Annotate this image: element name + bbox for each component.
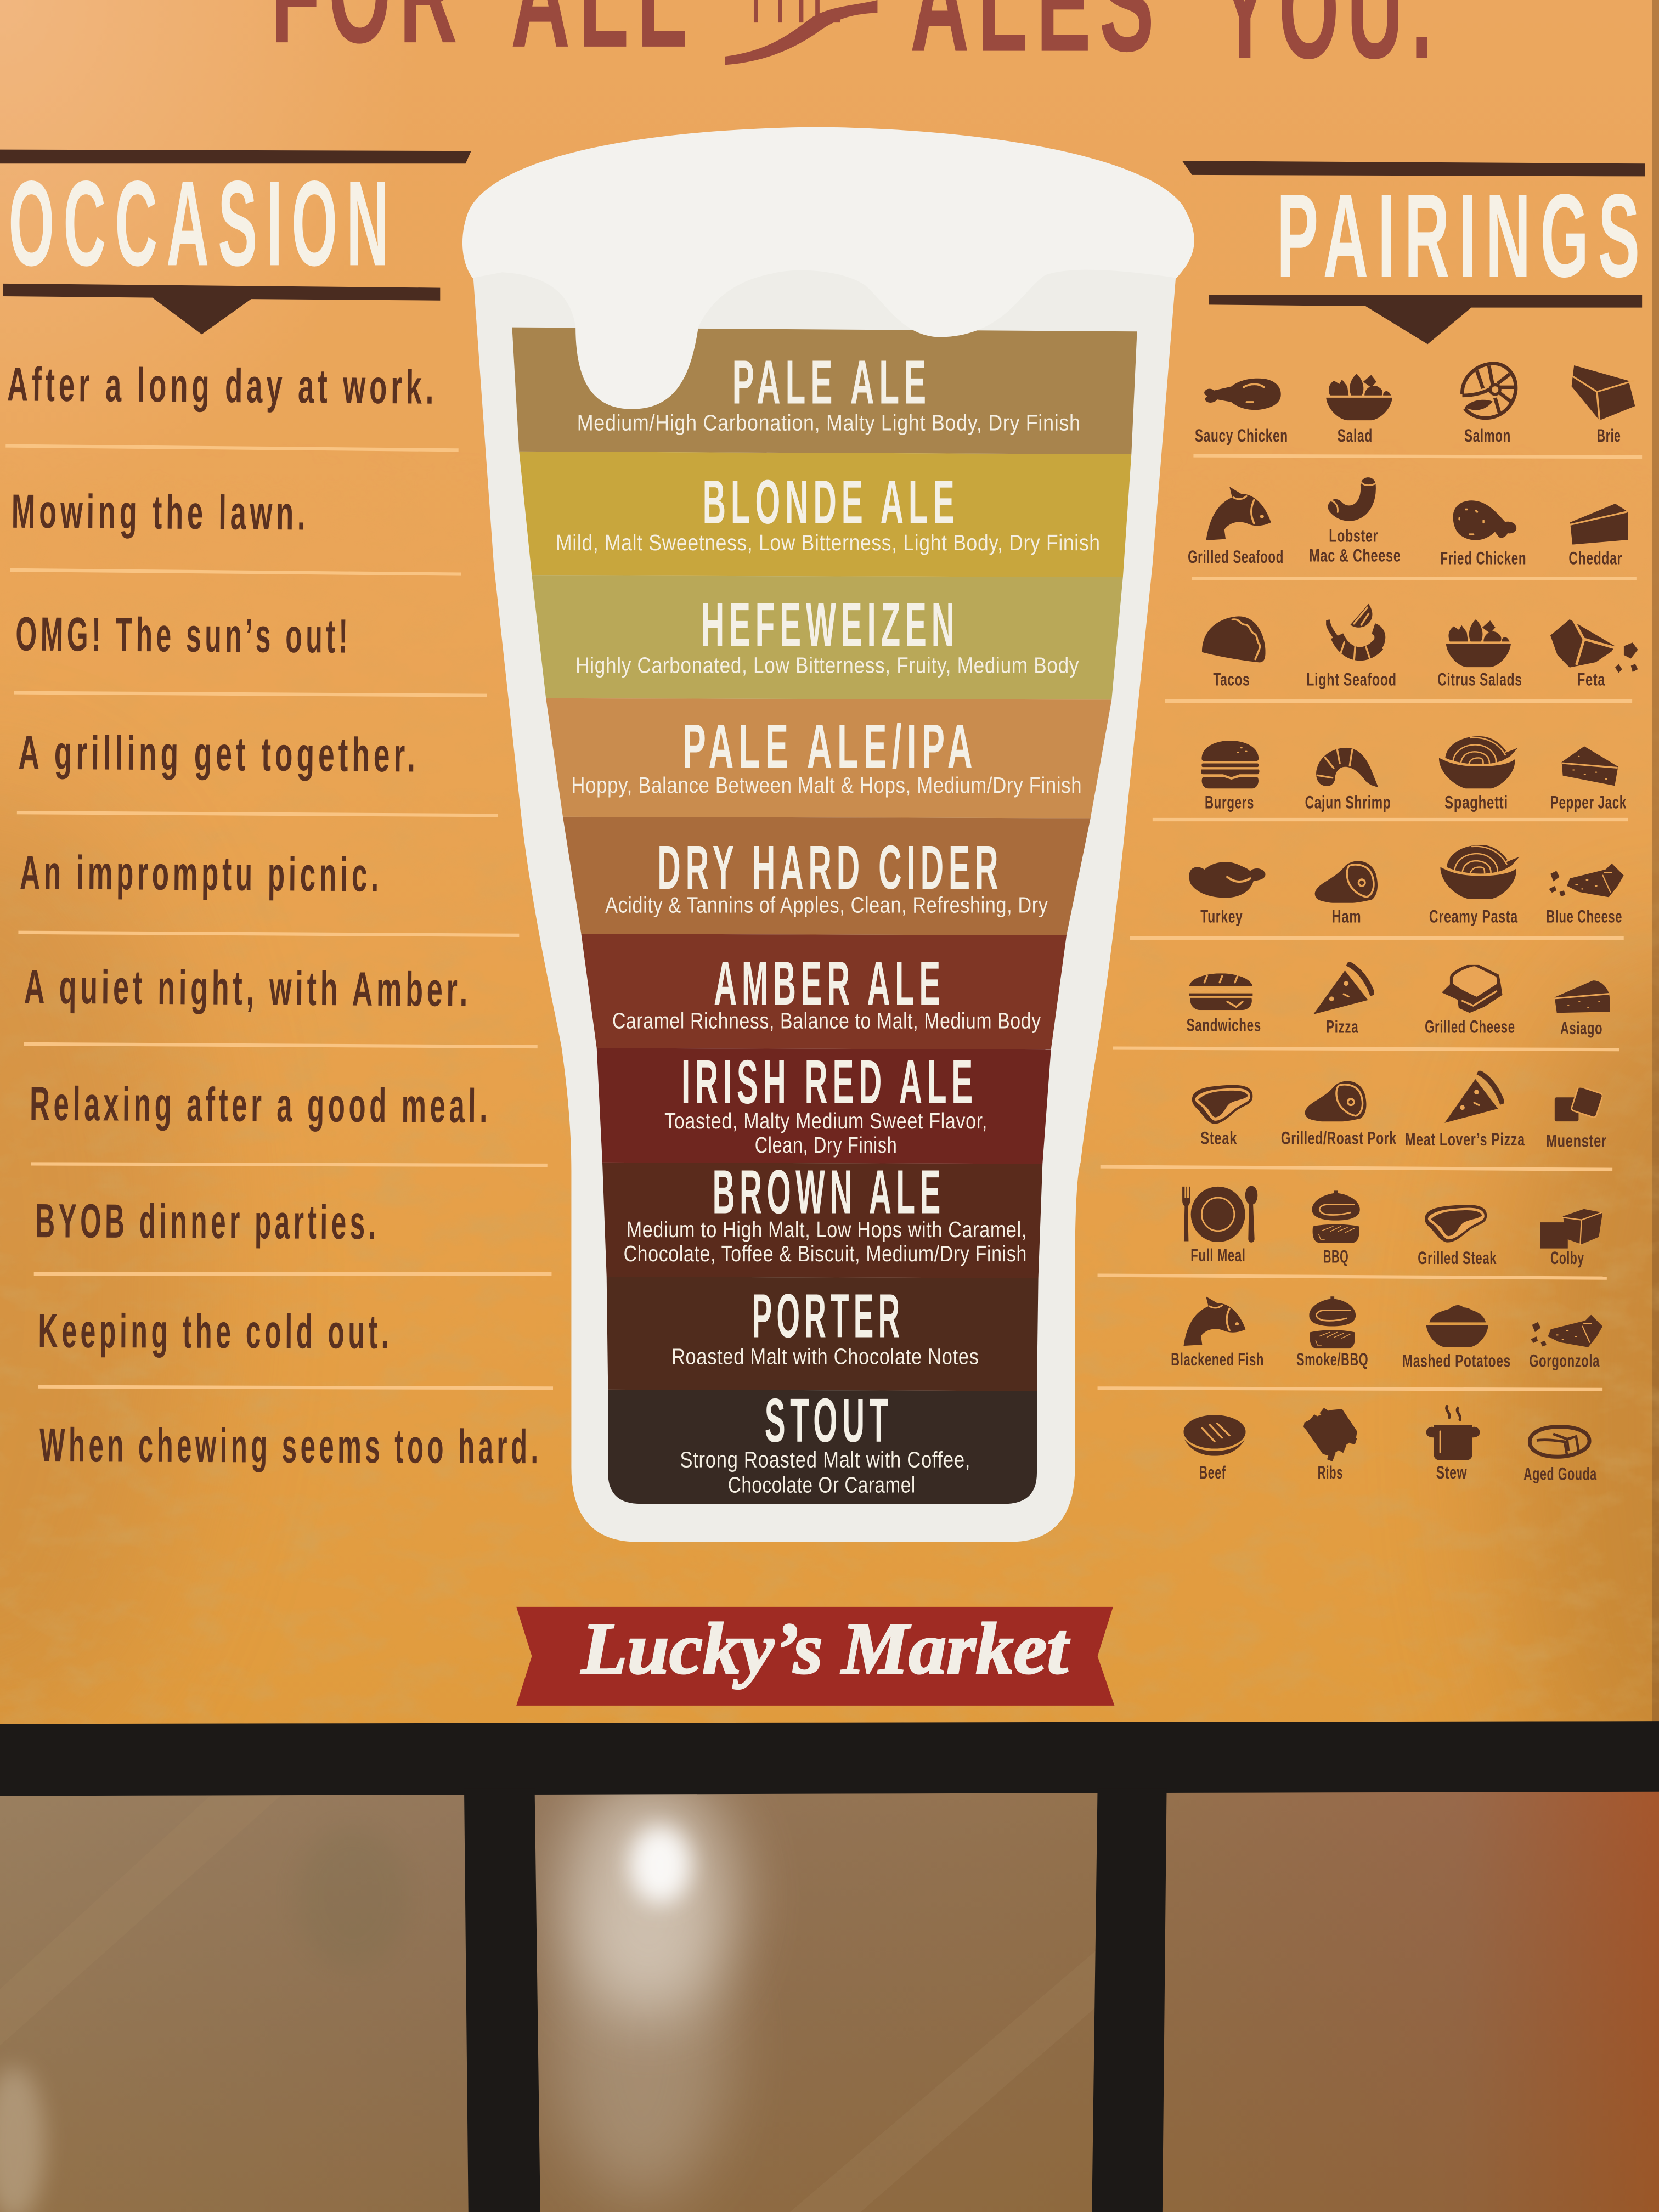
row 7: [1101, 1072, 1612, 1170]
row 6: Sandwiches: [1187, 1015, 1261, 1035]
foam: [462, 127, 1194, 409]
row 10: Stew: [1436, 1463, 1467, 1482]
row 7: Meat Lover’s Pizza: [1405, 1130, 1525, 1149]
band: Dry Hard Cider: [563, 817, 1091, 935]
row 5: [1130, 845, 1624, 938]
band: Pale Ale: Medium/High Carbonation, Malty Light Body, Dry Finish: [577, 410, 1081, 435]
row 1: Saucy Chicken: [1195, 426, 1288, 445]
band: Amber Ale: AMBER ALE: [714, 949, 945, 1018]
band: Amber Ale: Caramel Richness, Balance to Malt, Medium Body: [612, 1008, 1041, 1034]
band: Irish Red Ale: [597, 1047, 1051, 1164]
band: Hefeweizen: HEFEWEIZEN: [701, 590, 960, 659]
occasion item 4: A grilling get together.: [18, 725, 419, 782]
row 9: Gorgonzola: [1529, 1351, 1600, 1371]
row 2: Lobster: [1329, 526, 1378, 545]
occasion item 8: BYOB dinner parties.: [35, 1194, 380, 1249]
band: Dry Hard Cider: DRY HARD CIDER: [657, 833, 1003, 902]
row 1: Brie: [1597, 426, 1621, 445]
band: Pale Ale/IPA: Hoppy, Balance Between Malt & Hops, Medium/Dry Finish: [571, 772, 1082, 798]
row 6: Grilled Cheese: [1425, 1017, 1515, 1036]
band: Porter: PORTER: [752, 1282, 904, 1351]
row 7: Grilled/Roast Pork: [1281, 1128, 1397, 1148]
row 5: Ham: [1331, 907, 1361, 927]
row 3: Feta: [1577, 670, 1605, 690]
display frame: [0, 1721, 1659, 2212]
occasion item 5: An impromptu picnic.: [20, 845, 382, 902]
banner: Lucky's Market: Lucky’s Market: [580, 1608, 1070, 1689]
occasion item 9: Keeping the cold out.: [38, 1304, 392, 1359]
row 2: Cheddar: [1568, 549, 1622, 568]
band: Stout: STOUT: [765, 1386, 893, 1455]
row 2: Fried Chicken: [1440, 549, 1526, 568]
band: Stout: Chocolate Or Caramel: [728, 1472, 916, 1498]
band: Brown Ale: [602, 1157, 1042, 1278]
row 5: Creamy Pasta: [1429, 907, 1518, 927]
row 10: Beef: [1199, 1463, 1226, 1482]
band: Brown Ale: Chocolate, Toffee & Biscuit, Medium/Dry Finish: [624, 1241, 1027, 1266]
row 7: Muenster: [1546, 1131, 1607, 1151]
band: Irish Red Ale: Clean, Dry Finish: [755, 1132, 897, 1158]
row 10: Ribs: [1318, 1463, 1343, 1482]
row 3: [1165, 604, 1638, 701]
row 4: Spaghetti: [1444, 792, 1508, 812]
band: Pale Ale/IPA: PALE ALE/IPA: [683, 712, 978, 781]
pairings grid: [1098, 364, 1642, 1483]
band: Amber Ale: [581, 934, 1066, 1049]
row 3: Tacos: [1213, 670, 1250, 690]
row 8: Grilled Steak: [1418, 1248, 1497, 1268]
band: Irish Red Ale: Toasted, Malty Medium Sweet Flavor,: [664, 1108, 988, 1133]
row 8: [1098, 1186, 1607, 1278]
row 9: Mashed Potatoes: [1402, 1351, 1511, 1371]
floor: [0, 1778, 1659, 2212]
row 10: [1183, 1405, 1597, 1483]
row 9: Smoke/BBQ: [1296, 1350, 1368, 1369]
heading: Occasion: OCCASION: [8, 155, 398, 291]
row 6: [1113, 963, 1620, 1049]
band: Stout: [608, 1386, 1037, 1504]
row 6: Pizza: [1326, 1017, 1358, 1036]
band: Dry Hard Cider: Acidity & Tannins of Apples, Clean, Refreshing, Dry: [605, 893, 1048, 918]
band: Blonde Ale: Mild, Malt Sweetness, Low Bitterness, Light Body, Dry Finish: [556, 530, 1101, 555]
band: Hefeweizen: [532, 575, 1123, 699]
row 5: Turkey: [1200, 907, 1243, 927]
occasion item 3: OMG! The sun’s out!: [15, 607, 352, 663]
occasion item 7: Relaxing after a good meal.: [30, 1077, 491, 1133]
band: Pale Ale: PALE ALE: [732, 347, 931, 416]
band: Hefeweizen: Highly Carbonated, Low Bitterness, Fruity, Medium Body: [575, 653, 1079, 678]
row 3: Light Seafood: [1306, 670, 1397, 690]
heading: Pairings: [1182, 161, 1649, 344]
band: Porter: Roasted Malt with Chocolate Notes: [672, 1344, 979, 1369]
occasion item 2: Mowing the lawn.: [11, 484, 309, 540]
band: Blonde Ale: BLONDE ALE: [703, 467, 960, 537]
occasion list: [5, 357, 553, 1474]
row 4: Pepper Jack: [1550, 792, 1627, 812]
row 2: [1188, 482, 1637, 578]
band: Blonde Ale: [519, 452, 1131, 577]
row 2: Mac & Cheese: [1309, 545, 1401, 565]
row 4: Cajun Shrimp: [1305, 792, 1391, 812]
row 2: Grilled Seafood: [1188, 547, 1284, 567]
row 9: Blackened Fish: [1171, 1350, 1264, 1369]
row 1: [1193, 364, 1642, 457]
row 5: Blue Cheese: [1546, 907, 1622, 927]
stand leg: left: [464, 1789, 540, 2212]
stand leg: right: [1092, 1789, 1167, 2212]
occasion item 6: A quiet night, with Amber.: [24, 960, 471, 1017]
row 1: Salmon: [1464, 426, 1511, 445]
occasion item 1: After a long day at work.: [7, 357, 438, 414]
row 8: BBQ: [1323, 1246, 1348, 1266]
band: Brown Ale: BROWN ALE: [713, 1157, 945, 1226]
row 6: Asiago: [1560, 1018, 1602, 1038]
heading: Occasion: [0, 150, 471, 334]
row 8: Full Meal: [1190, 1245, 1246, 1265]
glass outline: [472, 268, 1177, 1542]
row 8: Colby: [1550, 1248, 1584, 1268]
row 4: [1153, 736, 1628, 820]
row 4: Burgers: [1205, 792, 1254, 812]
banner: Lucky's Market: [516, 1607, 1114, 1706]
occasion item 10: When chewing seems too hard.: [40, 1418, 542, 1474]
title: [271, 0, 1440, 88]
band: Stout: Strong Roasted Malt with Coffee,: [680, 1447, 970, 1472]
row 1: Salad: [1338, 426, 1373, 445]
row 7: Steak: [1200, 1128, 1237, 1148]
beer glass: [462, 127, 1194, 1542]
row 9: [1098, 1296, 1602, 1390]
row 10: Aged Gouda: [1523, 1464, 1597, 1483]
band: Pale Ale/IPA: [546, 698, 1111, 818]
band: Irish Red Ale: IRISH RED ALE: [681, 1047, 978, 1116]
band: Porter: [607, 1277, 1039, 1391]
band: Brown Ale: Medium to High Malt, Low Hops with Caramel,: [627, 1217, 1027, 1242]
row 3: Citrus Salads: [1437, 670, 1522, 690]
band: Pale Ale: [512, 328, 1137, 454]
